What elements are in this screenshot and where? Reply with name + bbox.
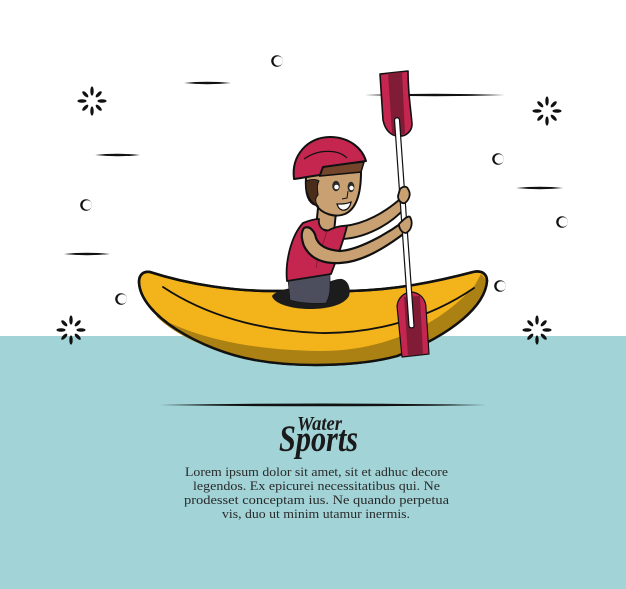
- paddle: [380, 71, 429, 357]
- top blade: [380, 71, 412, 136]
- cockpit: [272, 279, 350, 309]
- hair: [306, 180, 319, 206]
- kayak: [139, 271, 487, 365]
- title: Water Sports: Sports: [279, 419, 358, 460]
- helmet: [294, 137, 366, 179]
- title: Water Sports: Water: [297, 413, 342, 435]
- helmet band: [320, 162, 364, 176]
- helmet ridge: [304, 151, 347, 159]
- neck: [316, 208, 336, 232]
- paddler: [287, 137, 406, 303]
- body text: [184, 465, 450, 521]
- water background: [0, 336, 626, 589]
- body text: Lorem ipsum dolor sit amet, sit et adhuc decore: [185, 465, 448, 479]
- eyes: [332, 181, 354, 192]
- bottom blade centre: [404, 296, 423, 356]
- kayak hull shadow: [156, 274, 486, 365]
- bottom blade: [397, 292, 429, 357]
- life vest: [287, 219, 347, 281]
- top hand: [398, 187, 410, 203]
- back arm: [342, 200, 405, 239]
- vest inner line: [316, 231, 327, 268]
- body text: legendos. Ex epicurei necessitatibus qui. Ne: [193, 479, 440, 493]
- nose: [342, 191, 348, 199]
- decorative bubbles: [80, 55, 568, 305]
- shaft: [394, 118, 414, 328]
- kayak hull outline: [139, 271, 487, 365]
- front arm: [302, 222, 406, 263]
- motion lines: [64, 82, 563, 255]
- trousers: [288, 274, 330, 303]
- bottom hand: [399, 217, 412, 233]
- head: [306, 169, 361, 216]
- mouth: [337, 202, 351, 210]
- kayak seam: [163, 287, 474, 333]
- divider line: [160, 404, 486, 406]
- top blade centre: [388, 72, 405, 135]
- body text: prodesset conceptam ius. Ne quando perpetua: [184, 493, 450, 507]
- decorative sparkle stars: [56, 86, 562, 345]
- body text: vis, duo ut minim utamur inermis.: [222, 507, 410, 521]
- kayak hull: [139, 271, 487, 365]
